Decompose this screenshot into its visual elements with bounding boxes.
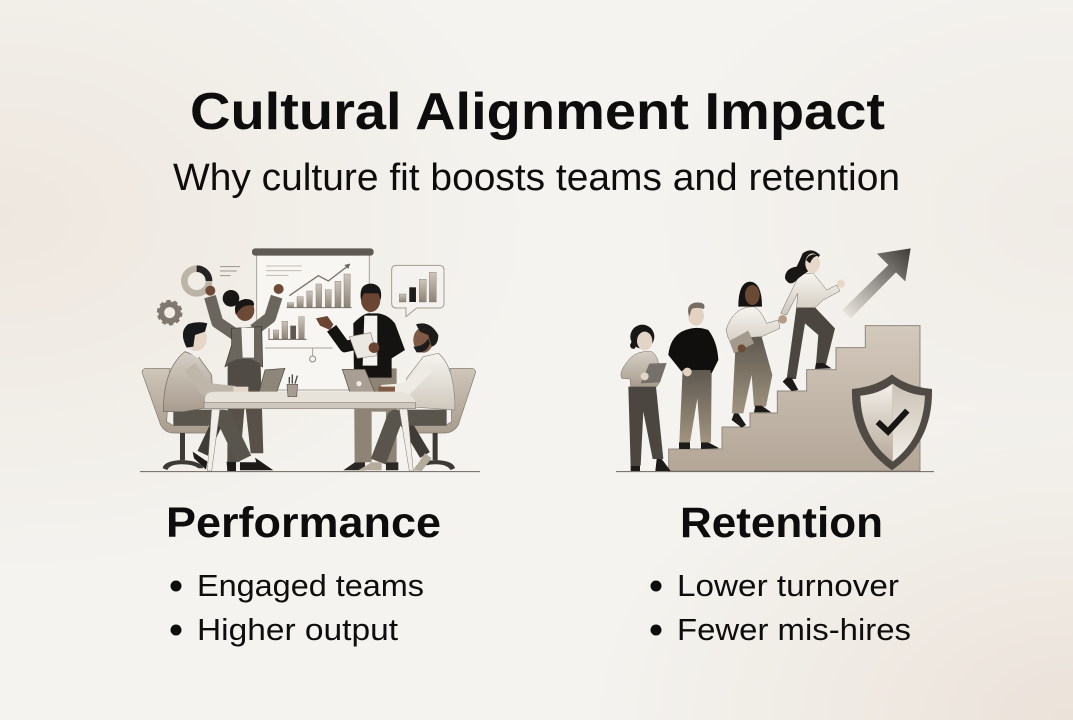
staircase [669, 326, 920, 471]
illustration: stairs retention [616, 248, 934, 472]
donut chart [184, 267, 240, 293]
title: Cultural Alignment Impact [190, 83, 885, 141]
heading: performance: Performance [166, 499, 441, 547]
chair left [142, 368, 208, 470]
heading: retention: Retention [680, 499, 883, 547]
table [204, 392, 416, 471]
chair right [410, 368, 476, 470]
shield check icon [852, 374, 932, 470]
pencil cup [287, 374, 298, 397]
bullet list: retention: Lower turnover [677, 568, 899, 603]
person: seated man left [163, 322, 258, 470]
panel: performance [166, 499, 441, 647]
panel: retention [650, 499, 911, 647]
gear icon [159, 302, 181, 324]
growth arrow [842, 248, 911, 318]
bullet list: performance [170, 568, 424, 647]
subtitle: Why culture fit boosts teams and retention [173, 157, 900, 199]
person: woman with folder holding hand [726, 282, 780, 428]
person: woman climbing stairs [778, 250, 845, 391]
bullet list: performance: Engaged teams [197, 568, 424, 603]
illustration: team meeting performance [140, 248, 480, 472]
person: man in black sweater [668, 303, 719, 449]
laptop right [342, 369, 400, 399]
laptop left [232, 368, 285, 398]
person: standing woman cheering [205, 284, 284, 471]
person: seated man right [358, 323, 455, 471]
bullet list: performance: Higher output [197, 612, 398, 647]
presentation board [252, 248, 374, 390]
speech bubble chart [392, 265, 444, 317]
person: presenter in black blazer [316, 284, 405, 470]
person: woman with clipboard [621, 325, 671, 471]
bullet list: retention [650, 568, 911, 647]
bullet list: retention: Fewer mis-hires [677, 612, 911, 647]
